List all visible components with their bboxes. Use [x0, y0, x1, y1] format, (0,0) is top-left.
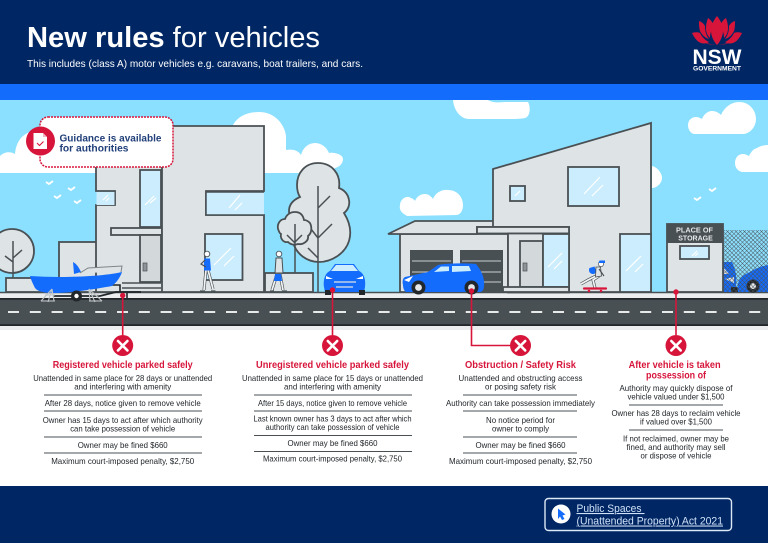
garage	[400, 234, 508, 292]
house 1 left volume	[96, 165, 163, 292]
front door	[520, 241, 543, 287]
list: Maximum court-imposed penalty, $2,750	[263, 454, 402, 464]
blue band	[0, 84, 768, 100]
house 1 main block	[162, 126, 264, 292]
trailer	[53, 292, 141, 296]
list: if valued over $1,500	[640, 416, 712, 426]
list: and interfering with amenity	[74, 382, 172, 392]
storage window	[680, 246, 709, 259]
pin	[469, 288, 474, 294]
house 2 main block	[493, 123, 651, 292]
skateboarder	[581, 260, 606, 292]
icon: waratah	[692, 16, 742, 45]
list	[242, 373, 423, 464]
icon: cross	[510, 335, 531, 356]
step	[122, 283, 161, 288]
list: or posing safety risk	[485, 382, 557, 392]
heading: possession of	[646, 370, 707, 382]
right window	[620, 234, 651, 292]
boat fin	[73, 262, 81, 274]
house 2	[388, 123, 651, 292]
footer band	[0, 486, 768, 543]
sidewalk	[0, 292, 768, 299]
boat stands	[41, 289, 102, 302]
tall window	[140, 170, 161, 227]
list: owner to comply	[492, 424, 550, 434]
NSW Government logo	[692, 16, 742, 72]
clouds	[0, 100, 768, 216]
list: authority can take possession of vehicle	[266, 422, 400, 432]
callout: guidance	[26, 117, 173, 167]
big window	[568, 167, 619, 206]
list	[33, 373, 213, 466]
button text: Public Spaces	[576, 503, 642, 515]
panel: obstruction	[446, 288, 596, 466]
connector	[675, 292, 677, 335]
title: New rules for vehicles	[27, 22, 320, 54]
panel: registered vehicle	[33, 293, 213, 466]
callout text: for authorities	[60, 142, 129, 154]
garage doors	[410, 250, 503, 292]
callout text: Guidance is available	[60, 132, 162, 144]
button: legislation link	[545, 498, 732, 530]
blue car	[403, 263, 484, 294]
left tree	[0, 229, 34, 279]
subtitle: This includes (class A) motor vehicles e.g. caravans, boat trailers, and cars.	[27, 58, 363, 70]
list: Owner may be fined $660	[476, 440, 566, 450]
car front view	[324, 264, 365, 295]
door	[140, 235, 161, 282]
storage sign text: STORAGE	[678, 236, 713, 242]
list: No notice period for	[486, 415, 555, 425]
large tree	[289, 163, 350, 292]
pin	[330, 287, 335, 293]
button outline	[545, 498, 732, 530]
list: fined, and authority may sell	[626, 442, 726, 452]
heading: Registered vehicle parked safely	[53, 360, 193, 371]
list: Authority can take possession immediately	[446, 398, 596, 408]
icon: cross	[112, 335, 133, 356]
boat on trailer	[30, 262, 141, 302]
porch roof	[477, 227, 569, 234]
callout box	[40, 117, 173, 167]
boat hull	[30, 272, 122, 293]
person walking 1	[200, 251, 216, 291]
right wall	[265, 273, 313, 292]
parked cars in storage	[723, 262, 768, 292]
street scene	[0, 100, 768, 330]
callout icon	[26, 126, 55, 156]
porch	[508, 234, 569, 292]
house 1	[59, 126, 264, 292]
panel: unregistered vehicle	[242, 287, 423, 464]
porch step	[503, 287, 569, 292]
heading: Unregistered vehicle parked safely	[256, 360, 409, 371]
logo sub-wordmark: GOVERNMENT	[693, 66, 741, 72]
heading: After vehicle is taken	[629, 360, 721, 371]
birds	[46, 181, 716, 203]
canopy	[111, 228, 162, 235]
icon: cross	[666, 335, 686, 356]
small square window	[510, 186, 525, 201]
list: Owner may be fined $660	[78, 440, 168, 450]
small tree	[278, 212, 311, 273]
list: Unattended in same place for 15 days or unattended	[242, 373, 423, 383]
road	[0, 298, 768, 326]
small window	[96, 192, 114, 205]
list: vehicle valued under $1,500	[628, 392, 725, 402]
sky	[0, 100, 768, 293]
list: Unattended and obstructing access	[458, 373, 582, 383]
list: Maximum court-imposed penalty, $2,750	[449, 456, 592, 466]
list: can take possession of vehicle	[70, 424, 176, 434]
list: Unattended in same place for 28 days or unattended	[33, 373, 213, 383]
heading: Obstruction / Safety Risk	[465, 360, 576, 371]
list: Maximum court-imposed penalty, $2,750	[51, 456, 195, 466]
lower window	[205, 234, 242, 280]
list: Last known owner has 3 days to act after which	[254, 414, 412, 424]
pin	[673, 289, 679, 295]
planter left	[6, 278, 64, 292]
storage building	[667, 224, 723, 292]
list	[446, 373, 596, 466]
list: Authority may quickly dispose of	[620, 383, 733, 393]
panel: after possession	[612, 289, 741, 460]
connector	[122, 296, 124, 335]
verge	[0, 326, 768, 330]
list: After 28 days, notice given to remove vehicle	[45, 398, 201, 408]
large horizontal window	[206, 192, 264, 215]
button text: (Unattended Property) Act 2021	[576, 516, 723, 528]
header band	[0, 0, 768, 84]
list: Owner has 15 days to act after which authority	[43, 415, 203, 425]
list: Owner has 28 days to reclaim vehicle	[612, 408, 741, 418]
icon: cross	[322, 335, 343, 356]
list: Owner may be fined $660	[288, 438, 378, 448]
connector	[332, 290, 334, 335]
storage sign	[667, 224, 723, 243]
connector	[472, 291, 510, 346]
list: or dispose of vehicle	[640, 450, 712, 460]
storage sign text: PLACE OF	[676, 228, 714, 234]
boat canopy	[80, 266, 122, 273]
list: If not reclaimed, owner may be	[623, 434, 729, 444]
list: After 15 days, notice given to remove vehicle	[258, 398, 407, 408]
low wall	[59, 242, 97, 292]
person walking 2	[270, 251, 287, 291]
list	[612, 383, 741, 460]
fence	[723, 230, 768, 292]
list: and interfering with amenity	[284, 382, 382, 392]
logo wordmark: NSW	[692, 45, 742, 69]
pin	[120, 293, 125, 298]
garage roof	[388, 221, 494, 234]
porch window	[543, 234, 569, 287]
wheel	[71, 290, 82, 302]
icon: cursor	[552, 504, 570, 524]
